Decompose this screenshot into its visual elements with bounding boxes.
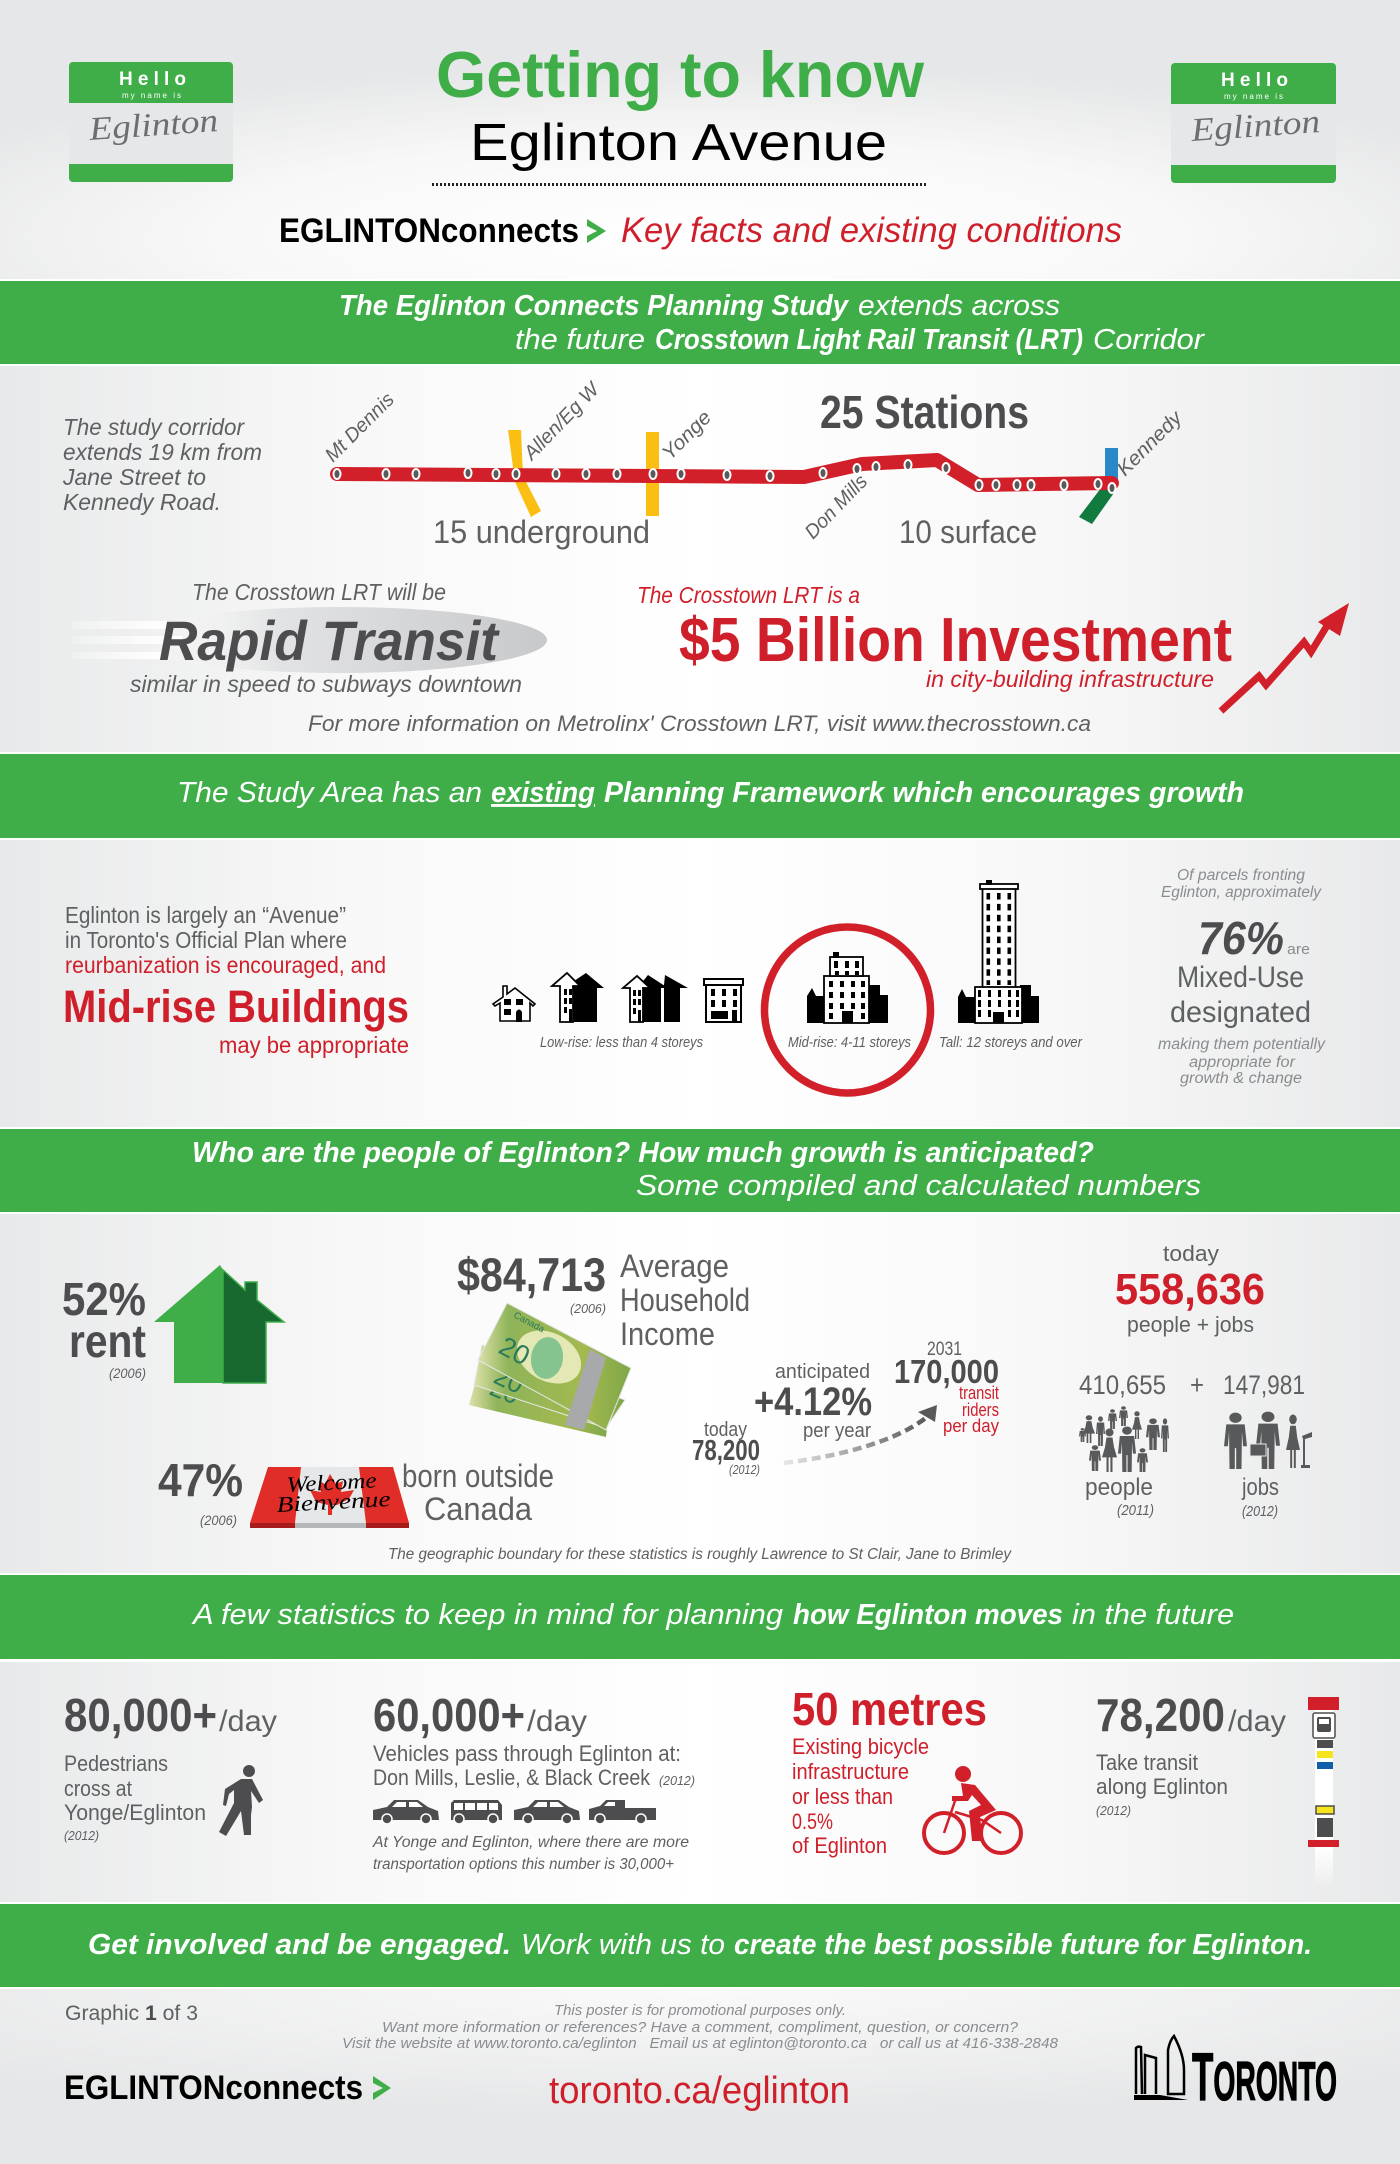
- caption: low-rise: Low-rise: less than 4 storeys: [540, 1034, 703, 1051]
- stat: bicycle infrastructure: [792, 1683, 987, 1858]
- labels: people and jobs: people: [1085, 1474, 1153, 1501]
- footer: Eglintonconnects logo: EGLINTONconnects: [64, 2069, 363, 2107]
- stat: household income: [457, 1248, 750, 1352]
- stat: transit riders: along Eglinton: [1096, 1774, 1228, 1799]
- footer: disclaimer and contact: This poster is for promotional purposes only.: [554, 2003, 846, 2019]
- transit line map: Kennedy: [1113, 406, 1187, 481]
- title: [432, 38, 928, 184]
- text: study corridor: Kennedy Road.: [63, 489, 221, 515]
- icon: walking person: [219, 1765, 263, 1836]
- banner: how Eglinton moves: how Eglinton moves: [793, 1599, 1063, 1631]
- icon: cyclist: [924, 1766, 1021, 1853]
- stat: bicycle infrastructure: or less than: [792, 1784, 893, 1809]
- stat: pedestrians: 80,000+: [64, 1689, 217, 1741]
- stat: vehicles: (2012): [659, 1773, 695, 1788]
- callout: rapid transit: Rapid Transit: [159, 609, 500, 672]
- banner: people of Eglinton: [0, 1129, 1400, 1212]
- stat: bicycle infrastructure: 0.5%: [792, 1809, 833, 1834]
- stat: pedestrians: cross at: [64, 1776, 132, 1801]
- stat: pedestrians: /day: [219, 1705, 277, 1738]
- text: mid-rise buildings: may be appropriate: [219, 1032, 409, 1058]
- banner: planning framework: Planning Framework which encourages growth: [604, 777, 1244, 809]
- stat: 76 percent mixed-use: Eglinton, approximately: [1161, 884, 1322, 901]
- stat: pedestrians: Pedestrians: [64, 1751, 168, 1776]
- stat: 76 percent mixed-use: designated: [1170, 996, 1311, 1029]
- stat: 76 percent mixed-use: 76%: [1198, 912, 1284, 964]
- text: mid-rise buildings: reurbanization is encouraged, and: [65, 952, 386, 978]
- text: study corridor: Jane Street to: [62, 464, 206, 490]
- stat: vehicles: [372, 1689, 695, 1873]
- icon: transit stop pole: [1308, 1697, 1339, 1887]
- footer: website: toronto.ca/eglinton: [549, 2070, 850, 2112]
- stat: 76 percent mixed-use: are: [1287, 941, 1310, 958]
- stat: people plus jobs: 410,655: [1079, 1370, 1166, 1400]
- icon: rising arrow: [1221, 603, 1349, 711]
- footer: disclaimer and contact: Want more information or references? Have a comment, compliment, question, or concern?: [382, 2020, 1019, 2036]
- stat: transit ridership growth: per day: [943, 1416, 999, 1436]
- stat: 47 percent born outside Canada: 47%: [158, 1454, 243, 1506]
- stat: people plus jobs: 558,636: [1115, 1265, 1265, 1314]
- banner: get involved: Work with us to: [521, 1929, 725, 1961]
- stat: transit ridership growth: transit: [959, 1383, 999, 1403]
- highlight ring: mid-rise: Mid-rise: 4-11 storeys: [788, 1034, 911, 1051]
- footer: disclaimer and contact: [342, 2003, 1058, 2052]
- subtitle: Eglintonconnects key facts: Key facts and existing conditions: [621, 211, 1122, 250]
- banner: people of Eglinton: Who are the people of Eglinton? How much growth is anticipated?: [192, 1137, 1094, 1169]
- text: study corridor: The study corridor: [63, 414, 245, 440]
- stat: 76 percent mixed-use: Mixed-Use: [1177, 961, 1304, 994]
- stat: 47 percent born outside Canada: (2006): [200, 1512, 237, 1528]
- banner: get involved: create the best possible future for Eglinton.: [734, 1929, 1312, 1961]
- text: study corridor: [62, 414, 262, 515]
- labels: people and jobs: jobs: [1241, 1474, 1279, 1501]
- icons: vehicles: [373, 1800, 656, 1824]
- stat: bicycle infrastructure: 50 metres: [792, 1683, 987, 1735]
- stat: transit riders: 78,200: [1096, 1689, 1225, 1741]
- note: geographic boundary: The geographic boundary for these statistics is roughly Lawrence to St Clair, Jane to Brimley: [388, 1546, 1012, 1563]
- footer: graphic number: Graphic 1 of 3: [65, 2002, 198, 2025]
- stat: household income: Household: [620, 1282, 750, 1318]
- footer: disclaimer and contact: Visit the website at www.toronto.ca/eglinton Email us at eglinton@toronto.ca or call us at 416-338-2848: [342, 2036, 1058, 2052]
- title: Eglinton Avenue: [470, 114, 887, 172]
- name tag: right: my name is: [1224, 92, 1283, 101]
- banner: get involved: [0, 1904, 1400, 1987]
- stat: bicycle infrastructure: of Eglinton: [792, 1833, 887, 1858]
- stat: vehicles: Vehicles pass through Eglinton at:: [373, 1741, 681, 1766]
- banner: planning framework: [0, 754, 1400, 838]
- stat: 52 percent rent: 52%: [62, 1273, 146, 1325]
- name tag: left: my name is: [122, 91, 181, 100]
- banner: get involved: Get involved and be engaged.: [88, 1929, 511, 1961]
- name tag: right: Eglinton: [1189, 104, 1321, 149]
- stat: household income: $84,713: [457, 1248, 606, 1301]
- labels: people and jobs: [1085, 1474, 1279, 1520]
- stat: 47 percent born outside Canada: Canada: [424, 1491, 532, 1527]
- banner: planning study: extends across: [858, 290, 1060, 322]
- banner: planning framework: The Study Area has an: [177, 777, 482, 809]
- stat: pedestrians: (2012): [64, 1828, 99, 1843]
- stat: pedestrians: [64, 1689, 277, 1843]
- text: study corridor: extends 19 km from: [63, 439, 262, 465]
- stat: transit riders: /day: [1228, 1705, 1286, 1738]
- stat: people plus jobs: people + jobs: [1127, 1312, 1254, 1337]
- banner: planning study: The Eglinton Connects Planning Study: [339, 290, 850, 322]
- labels: people and jobs: (2011): [1117, 1502, 1154, 1519]
- stat: people plus jobs: [1079, 1241, 1305, 1400]
- icon: low-rise buildings: [493, 973, 743, 1022]
- stat: household income: (2006): [570, 1301, 606, 1316]
- stat: 76 percent mixed-use: appropriate for: [1189, 1054, 1296, 1071]
- banner: planning study: [0, 281, 1400, 364]
- icon: welcome mat: Welcome: [286, 1467, 377, 1497]
- text: mid-rise buildings: Eglinton is largely an “Avenue”: [65, 902, 346, 928]
- icon: people group: [1079, 1406, 1169, 1472]
- stat: transit ridership growth: (2012): [729, 1462, 760, 1477]
- stat: vehicles: At Yonge and Eglinton, where there are more: [372, 1834, 689, 1851]
- labels: underground and surface: [433, 514, 1037, 550]
- banner: people of Eglinton: Some compiled and calculated numbers: [636, 1170, 1201, 1202]
- icon: twenty dollar bills: 20: [486, 1372, 524, 1410]
- highlight ring: mid-rise: [764, 927, 930, 1093]
- stat: vehicles: 60,000+: [373, 1689, 525, 1741]
- icon: twenty dollar bills: [469, 1303, 631, 1437]
- banner: planning framework: existing: [491, 777, 595, 809]
- stat: 76 percent mixed-use: Of parcels fronting: [1177, 867, 1305, 884]
- transit line map: [321, 377, 1187, 543]
- stat: 76 percent mixed-use: [1158, 867, 1326, 1087]
- stat: bicycle infrastructure: infrastructure: [792, 1759, 909, 1784]
- subtitle: Eglintonconnects key facts: EGLINTONconnects: [279, 212, 579, 250]
- stat: transit ridership growth: anticipated: [775, 1361, 870, 1383]
- stat: people plus jobs: 147,981: [1223, 1370, 1305, 1400]
- icon: house: [154, 1265, 284, 1383]
- stat: household income: Income: [620, 1316, 715, 1352]
- transit line map: Yonge: [658, 407, 716, 465]
- callout: rapid transit: similar in speed to subways downtown: [130, 671, 522, 697]
- subtitle: Eglintonconnects key facts: [279, 211, 1122, 250]
- stat: transit riders: Take transit: [1096, 1750, 1198, 1775]
- text: mid-rise buildings: in Toronto's Official Plan where: [65, 927, 347, 953]
- icon: twenty dollar bills: Canada: [512, 1310, 547, 1336]
- transit line map: Allen/Eg W: [519, 377, 605, 465]
- transit line map: Don Mills: [801, 471, 872, 543]
- stat: 76 percent mixed-use: making them potentially: [1158, 1036, 1326, 1053]
- title: Getting to know: [436, 38, 924, 111]
- callout: 5 billion investment: The Crosstown LRT is a: [637, 582, 860, 608]
- stat: transit ridership growth: today: [704, 1419, 747, 1441]
- name tag: left: [69, 62, 233, 182]
- banner: how Eglinton moves: [0, 1575, 1400, 1659]
- callout: 5 billion investment: $5 Billion Investment: [679, 606, 1232, 675]
- stat: transit ridership growth: [692, 1339, 999, 1477]
- icon: welcome mat: [250, 1467, 409, 1528]
- heading: 25 stations: 25 Stations: [820, 386, 1029, 438]
- footer: Toronto logo: [1134, 2036, 1337, 2115]
- icon: workers: [1224, 1412, 1312, 1469]
- stat: 76 percent mixed-use: growth & change: [1180, 1070, 1302, 1087]
- stat: 47 percent born outside Canada: [158, 1454, 554, 1528]
- stat: transit ridership growth: 2031: [927, 1339, 962, 1360]
- stat: transit riders: (2012): [1096, 1803, 1131, 1818]
- banner: how Eglinton moves: in the future: [1072, 1599, 1234, 1631]
- text: mid-rise buildings: Mid-rise Buildings: [63, 981, 409, 1032]
- stat: transit riders: [1096, 1689, 1286, 1818]
- stat: transit ridership growth: riders: [962, 1400, 999, 1420]
- stat: people plus jobs: today: [1163, 1241, 1219, 1266]
- caption: tall: Tall: 12 storeys and over: [939, 1034, 1083, 1051]
- stat: vehicles: /day: [527, 1705, 587, 1738]
- stat: transit ridership growth: per year: [803, 1420, 871, 1442]
- name tag: left: Hello: [119, 69, 186, 90]
- transit line map: Mt Dennis: [321, 389, 399, 467]
- banner: planning study: the future: [515, 324, 645, 356]
- text: mid-rise buildings: [63, 902, 409, 1058]
- banner: planning study: Corridor: [1093, 324, 1205, 356]
- stat: 52 percent rent: rent: [69, 1315, 146, 1367]
- stat: household income: Average: [620, 1248, 729, 1284]
- labels: people and jobs: (2012): [1242, 1503, 1278, 1520]
- name tag: left: Eglinton: [87, 103, 219, 148]
- stat: vehicles: Don Mills, Leslie, & Black Creek: [373, 1765, 651, 1790]
- icon: tall building: [958, 880, 1039, 1023]
- icon: welcome mat: Bienvenue: [276, 1486, 391, 1517]
- banner: how Eglinton moves: A few statistics to keep in mind for planning: [191, 1599, 783, 1631]
- labels: underground and surface: 15 underground: [433, 514, 650, 550]
- name tag: right: Hello: [1221, 70, 1288, 91]
- stat: 47 percent born outside Canada: born outside: [402, 1458, 554, 1494]
- callout: rapid transit: [72, 579, 547, 697]
- callout: 5 billion investment: [637, 582, 1232, 692]
- stat: pedestrians: Yonge/Eglinton: [64, 1800, 206, 1825]
- callout: rapid transit: The Crosstown LRT will be: [192, 579, 446, 605]
- banner: planning study: Crosstown Light Rail Transit (LRT): [655, 324, 1083, 356]
- text: more information: For more information on Metrolinx' Crosstown LRT, visit www.thecrosstown.ca: [308, 711, 1091, 736]
- name tag: right: [1171, 63, 1336, 183]
- stat: 52 percent rent: [62, 1273, 146, 1381]
- labels: underground and surface: 10 surface: [899, 514, 1037, 550]
- stat: transit ridership growth: 78,200: [692, 1435, 760, 1467]
- stat: 52 percent rent: (2006): [109, 1365, 146, 1381]
- stat: people plus jobs: +: [1190, 1370, 1204, 1400]
- stat: transit ridership growth: 170,000: [894, 1353, 999, 1390]
- stat: transit ridership growth: +4.12%: [754, 1380, 872, 1424]
- stat: bicycle infrastructure: Existing bicycle: [792, 1734, 929, 1759]
- icon: twenty dollar bills: 20: [494, 1331, 535, 1371]
- stat: vehicles: transportation options this number is 30,000+: [373, 1856, 674, 1873]
- icon: twenty dollar bills: 20: [489, 1360, 528, 1400]
- callout: 5 billion investment: in city-building infrastructure: [926, 666, 1214, 692]
